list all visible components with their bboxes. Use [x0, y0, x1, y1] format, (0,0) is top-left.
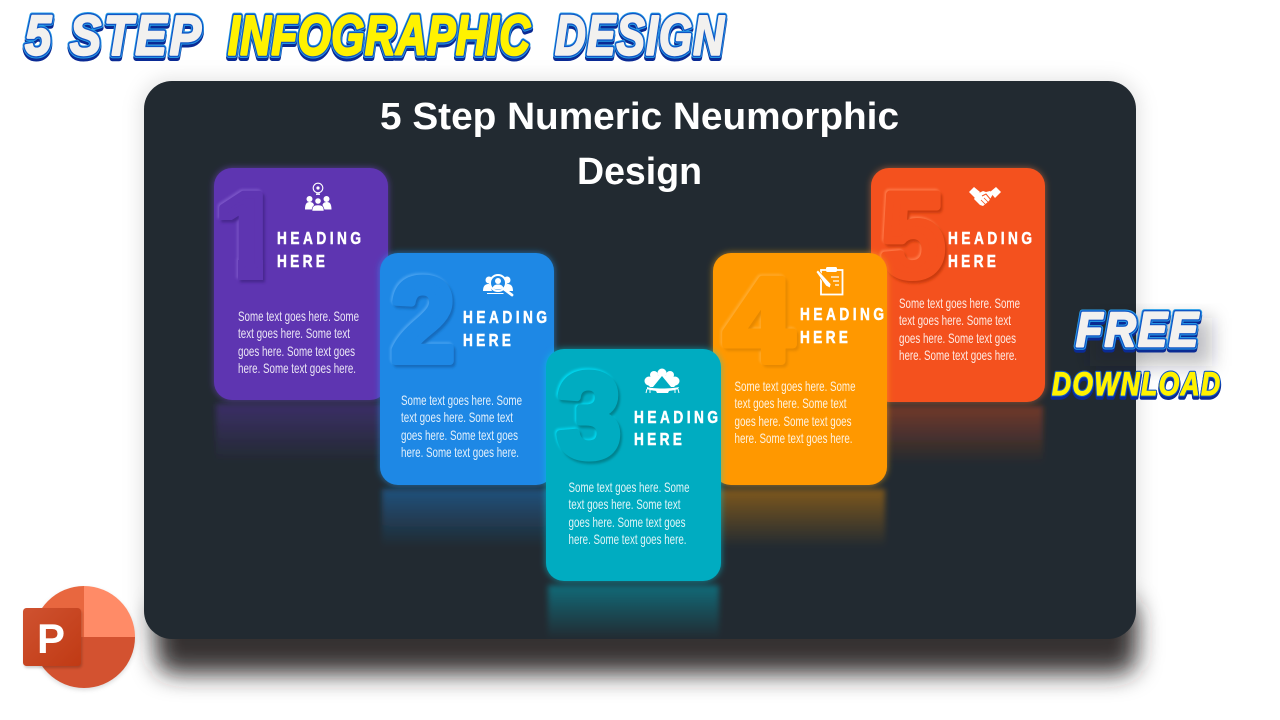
banner word: 5 STEP: 5 STEP [25, 7, 201, 69]
body text 4 [734, 378, 856, 446]
main title: Design [577, 151, 702, 193]
body text 5: goes here. Some text goes [899, 330, 1016, 346]
body text 3: goes here. Some text goes [568, 514, 686, 530]
number 5: 5 [880, 167, 943, 300]
dark main panel [140, 78, 1140, 644]
body text 3 [568, 479, 690, 547]
icon: idea team [305, 183, 332, 211]
heading 1: HERE [277, 252, 325, 272]
number 3: 3 [559, 351, 622, 484]
number 2: 2 [393, 256, 456, 389]
body text 3: here. Some text goes here. [568, 531, 686, 547]
heading 3: HEADING [634, 408, 718, 428]
word: FREE: FREE [1076, 303, 1199, 357]
icon: clipboard [816, 267, 842, 294]
body text 4: text goes here. Some text [734, 395, 847, 411]
number 5: 5 [883, 171, 946, 304]
heading 4: HEADING [800, 305, 884, 325]
banner word: 5 STEP: 5 STEP [25, 4, 201, 66]
banner word: 5 STEP: 5 STEP [25, 4, 201, 66]
number 3: 3 [557, 349, 621, 482]
heading 3 [634, 408, 718, 450]
word: DOWNLOAD: DOWNLOAD [1052, 370, 1220, 405]
main title [380, 96, 899, 193]
word: DOWNLOAD: DOWNLOAD [1052, 368, 1220, 403]
word: DOWNLOAD: DOWNLOAD [1052, 368, 1220, 403]
icon: people search [483, 275, 513, 295]
number 1: 1 [214, 168, 279, 300]
number 2: 2 [390, 252, 453, 385]
heading 2: HEADING [463, 308, 547, 328]
icon: PowerPoint logo [23, 586, 135, 690]
number 5: 5 [881, 169, 945, 302]
body text 4: goes here. Some text goes [734, 413, 852, 429]
word: FREE: FREE [1076, 303, 1199, 357]
number 1: 1 [217, 172, 283, 304]
banner title [25, 4, 725, 70]
heading 3: HERE [634, 430, 682, 450]
heading 5: HERE [948, 252, 996, 272]
number 4: 4 [727, 256, 796, 389]
banner word: INFOGRAPHIC: INFOGRAPHIC [228, 4, 531, 67]
heading 5: HEADING [948, 229, 1032, 249]
free download badge [1052, 303, 1220, 405]
heading 5 [948, 229, 1032, 272]
body text 2: goes here. Some text goes [401, 427, 518, 443]
body text 1 [238, 308, 359, 376]
body text 5: here. Some text goes here. [899, 347, 1017, 363]
banner word: INFOGRAPHIC: INFOGRAPHIC [228, 4, 531, 67]
number 2: 2 [391, 254, 455, 387]
icon: handshake [969, 187, 1001, 206]
body text 1: here. Some text goes here. [238, 360, 356, 376]
number 4: 4 [723, 252, 792, 385]
heading 1 [277, 229, 361, 272]
heading 1: HEADING [277, 229, 361, 249]
main title: 5 Step Numeric Neumorphic [380, 96, 899, 138]
card 5: orange-red [871, 167, 1045, 464]
banner word: INFOGRAPHIC: INFOGRAPHIC [228, 7, 531, 70]
heading 4 [800, 305, 884, 348]
heading 4: HERE [800, 328, 848, 348]
body text 5: text goes here. Some text [899, 312, 1011, 328]
panel shadow [156, 600, 1137, 674]
card 3: teal [546, 347, 721, 639]
number 4: 4 [725, 254, 793, 386]
word: FREE: FREE [1076, 306, 1199, 360]
number 1 [217, 188, 266, 284]
body text 3: Some text goes here. Some [568, 479, 690, 495]
heading 2 [463, 308, 547, 351]
word: FREE: FREE [1076, 303, 1199, 357]
body text 2: here. Some text goes here. [401, 444, 519, 460]
body text 5: Some text goes here. Some [899, 295, 1020, 311]
banner word: INFOGRAPHIC: INFOGRAPHIC [228, 4, 531, 67]
body text 2: text goes here. Some text [401, 409, 513, 425]
banner word: DESIGN: DESIGN [555, 7, 725, 70]
banner word: DESIGN: DESIGN [555, 4, 725, 67]
body text 4: here. Some text goes here. [734, 430, 852, 446]
icon: round table team [644, 368, 680, 393]
card 4: amber [713, 252, 887, 547]
banner word: DESIGN: DESIGN [555, 4, 725, 67]
body text 5 [899, 295, 1020, 363]
card 1: purple [214, 168, 388, 462]
body text 1: goes here. Some text goes [238, 343, 355, 359]
banner word: DESIGN: DESIGN [555, 4, 725, 67]
card 2: blue [380, 252, 554, 547]
body text 1: Some text goes here. Some [238, 308, 359, 324]
body text 2 [401, 392, 522, 460]
body text 1: text goes here. Some text [238, 325, 350, 341]
icon: PowerPoint logo: P [37, 615, 65, 662]
body text 3: text goes here. Some text [568, 496, 681, 512]
banner word: 5 STEP: 5 STEP [25, 4, 201, 66]
number 3: 3 [556, 347, 619, 480]
number 1: 1 [215, 170, 281, 302]
body text 4: Some text goes here. Some [734, 378, 856, 394]
heading 2: HERE [463, 331, 511, 351]
body text 2: Some text goes here. Some [401, 392, 522, 408]
